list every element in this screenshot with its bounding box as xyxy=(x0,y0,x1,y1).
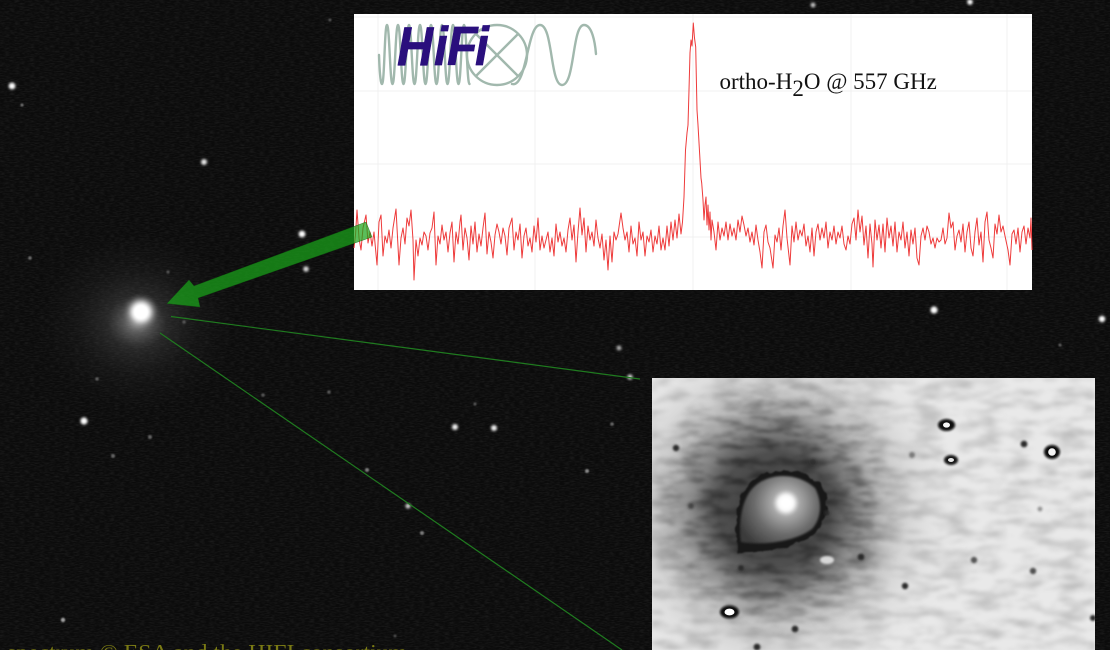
logo waveform and mixer symbol xyxy=(379,25,596,85)
coma texture xyxy=(640,373,910,637)
arrow from spectrum to comet xyxy=(167,222,372,307)
spectrum label: O @ 557 GHz xyxy=(804,69,937,94)
dark coma halo xyxy=(652,378,928,650)
dark contour ring around nucleus xyxy=(735,470,827,552)
panel: enhanced comet image xyxy=(652,378,1095,650)
spectrum label: 2 xyxy=(792,76,804,101)
spectrum label: ortho-H xyxy=(720,69,792,94)
faint stars in negative image xyxy=(673,441,1096,650)
faint sky texture xyxy=(652,378,1095,650)
zoom guide lines xyxy=(160,316,640,650)
light smudge below coma xyxy=(820,556,834,564)
chart grid xyxy=(354,14,1032,290)
ringed stars in negative image xyxy=(720,419,1060,618)
spectrum line with water emission peak xyxy=(354,23,1032,280)
logo wordmark: HiFi xyxy=(397,16,490,78)
HiFi logo xyxy=(379,16,596,85)
panel: water spectrum xyxy=(354,14,1032,290)
comet in the night sky xyxy=(37,232,237,412)
bright comet nucleus xyxy=(740,476,820,543)
